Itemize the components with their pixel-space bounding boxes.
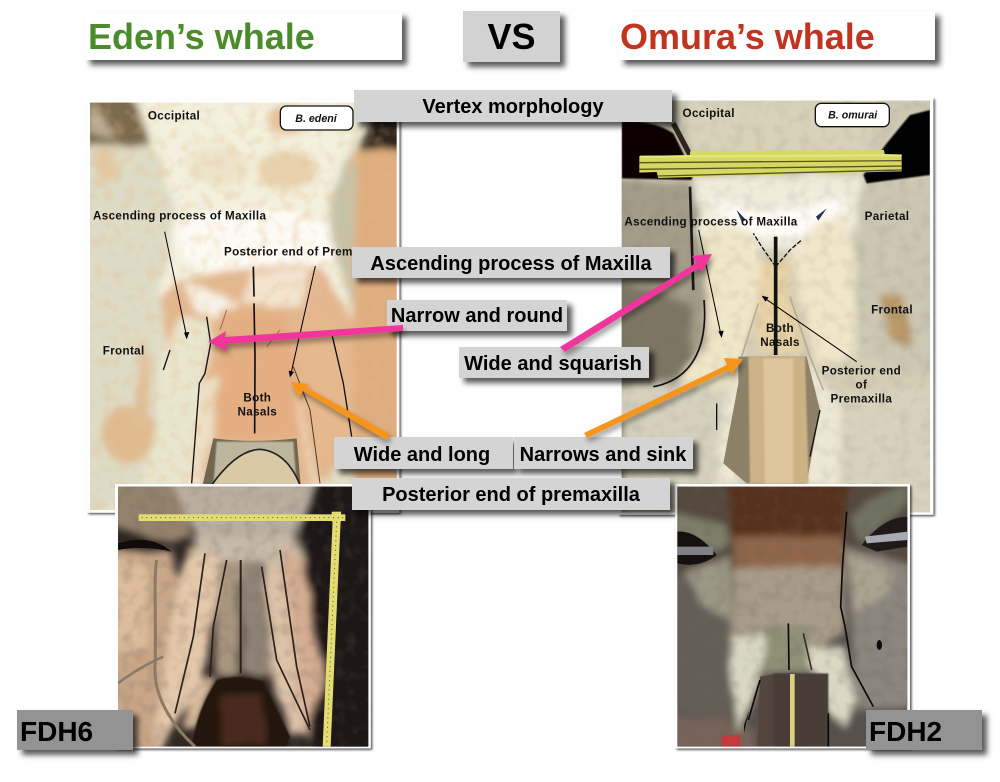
photo: B. omurai skull vertex: Both	[766, 322, 794, 335]
title box: Omura's whale	[619, 11, 935, 60]
photo: B. edeni skull vertex: Nasals	[238, 405, 277, 418]
label: Wide and long: Wide and long	[354, 444, 490, 466]
label: Vertex morphology	[354, 90, 672, 122]
title box: VS: VS	[487, 16, 536, 57]
photo: B. omurai skull vertex: Parietal	[865, 210, 909, 223]
arrow: orange to wide and long premaxilla	[291, 382, 390, 440]
title box: Eden's whale	[85, 12, 402, 60]
label: FDH2	[866, 710, 982, 750]
icon: yellow measuring tape vertical	[323, 520, 341, 747]
label: Vertex morphology: Vertex morphology	[422, 96, 604, 118]
label: Narrows and sink	[514, 437, 693, 469]
annotation: B. omurai tag: B. omurai	[828, 109, 878, 121]
label: Narrow and round	[387, 300, 567, 331]
photo: B. omurai skull vertex: Ascending process of Maxilla	[624, 215, 798, 228]
label: FDH6: FDH6	[20, 716, 93, 747]
annotation: B. edeni tag	[280, 106, 353, 130]
arrow: orange to narrows and sink premaxilla	[584, 358, 743, 438]
annotation: B. omurai tag	[815, 103, 889, 127]
icon: yellow measuring tape horizontal	[139, 512, 345, 522]
photo: B. edeni skull vertex: Posterior end of Prem	[224, 246, 353, 259]
arrow: pink to narrow and round maxilla	[208, 325, 403, 351]
photo: B. omurai skull vertex	[610, 90, 943, 520]
label: Posterior end of premaxilla	[352, 478, 670, 510]
annotation: B. edeni tag: B. edeni	[295, 113, 338, 125]
photo: B. edeni skull vertex: Occipital	[148, 110, 200, 123]
label: Ascending process of Maxilla: Ascending process of Maxilla	[370, 253, 652, 275]
label: Ascending process of Maxilla	[352, 247, 670, 278]
label: FDH2: FDH2	[869, 716, 942, 747]
photo: B. omurai skull vertex: Posterior end	[822, 365, 901, 378]
title box: VS	[463, 11, 560, 62]
photo: B. edeni skull vertex	[80, 90, 410, 520]
label: Narrows and sink: Narrows and sink	[520, 444, 687, 466]
label: Wide and squarish: Wide and squarish	[464, 353, 642, 375]
photo: B. omurai skull vertex: Premaxilla	[831, 393, 892, 406]
label: Wide and long	[334, 437, 513, 469]
photo: FDH6 skull	[100, 480, 377, 757]
photo: B. omurai skull vertex: Frontal	[871, 303, 913, 316]
icon: yellow folding ruler	[639, 150, 902, 178]
photo: B. omurai skull vertex: Occipital	[683, 107, 735, 120]
title box: Omura's whale: Omura’s whale	[620, 16, 875, 57]
label: Wide and squarish	[459, 347, 649, 378]
photo: B. omurai skull vertex: of	[855, 379, 867, 392]
label: FDH6	[17, 710, 133, 750]
photo: B. edeni skull vertex: Frontal	[103, 345, 145, 358]
arrow: pink to wide and squarish maxilla	[560, 254, 712, 352]
label: Posterior end of premaxilla: Posterior end of premaxilla	[382, 484, 641, 506]
photo: B. edeni skull vertex: Ascending process of Maxilla	[93, 209, 266, 222]
photo: B. omurai skull vertex: Nasals	[760, 336, 800, 349]
photo: B. edeni skull vertex: Both	[243, 391, 271, 404]
label: Narrow and round: Narrow and round	[391, 305, 563, 327]
title box: Eden's whale: Eden’s whale	[88, 16, 315, 57]
photo: FDH2 skull	[670, 480, 917, 757]
